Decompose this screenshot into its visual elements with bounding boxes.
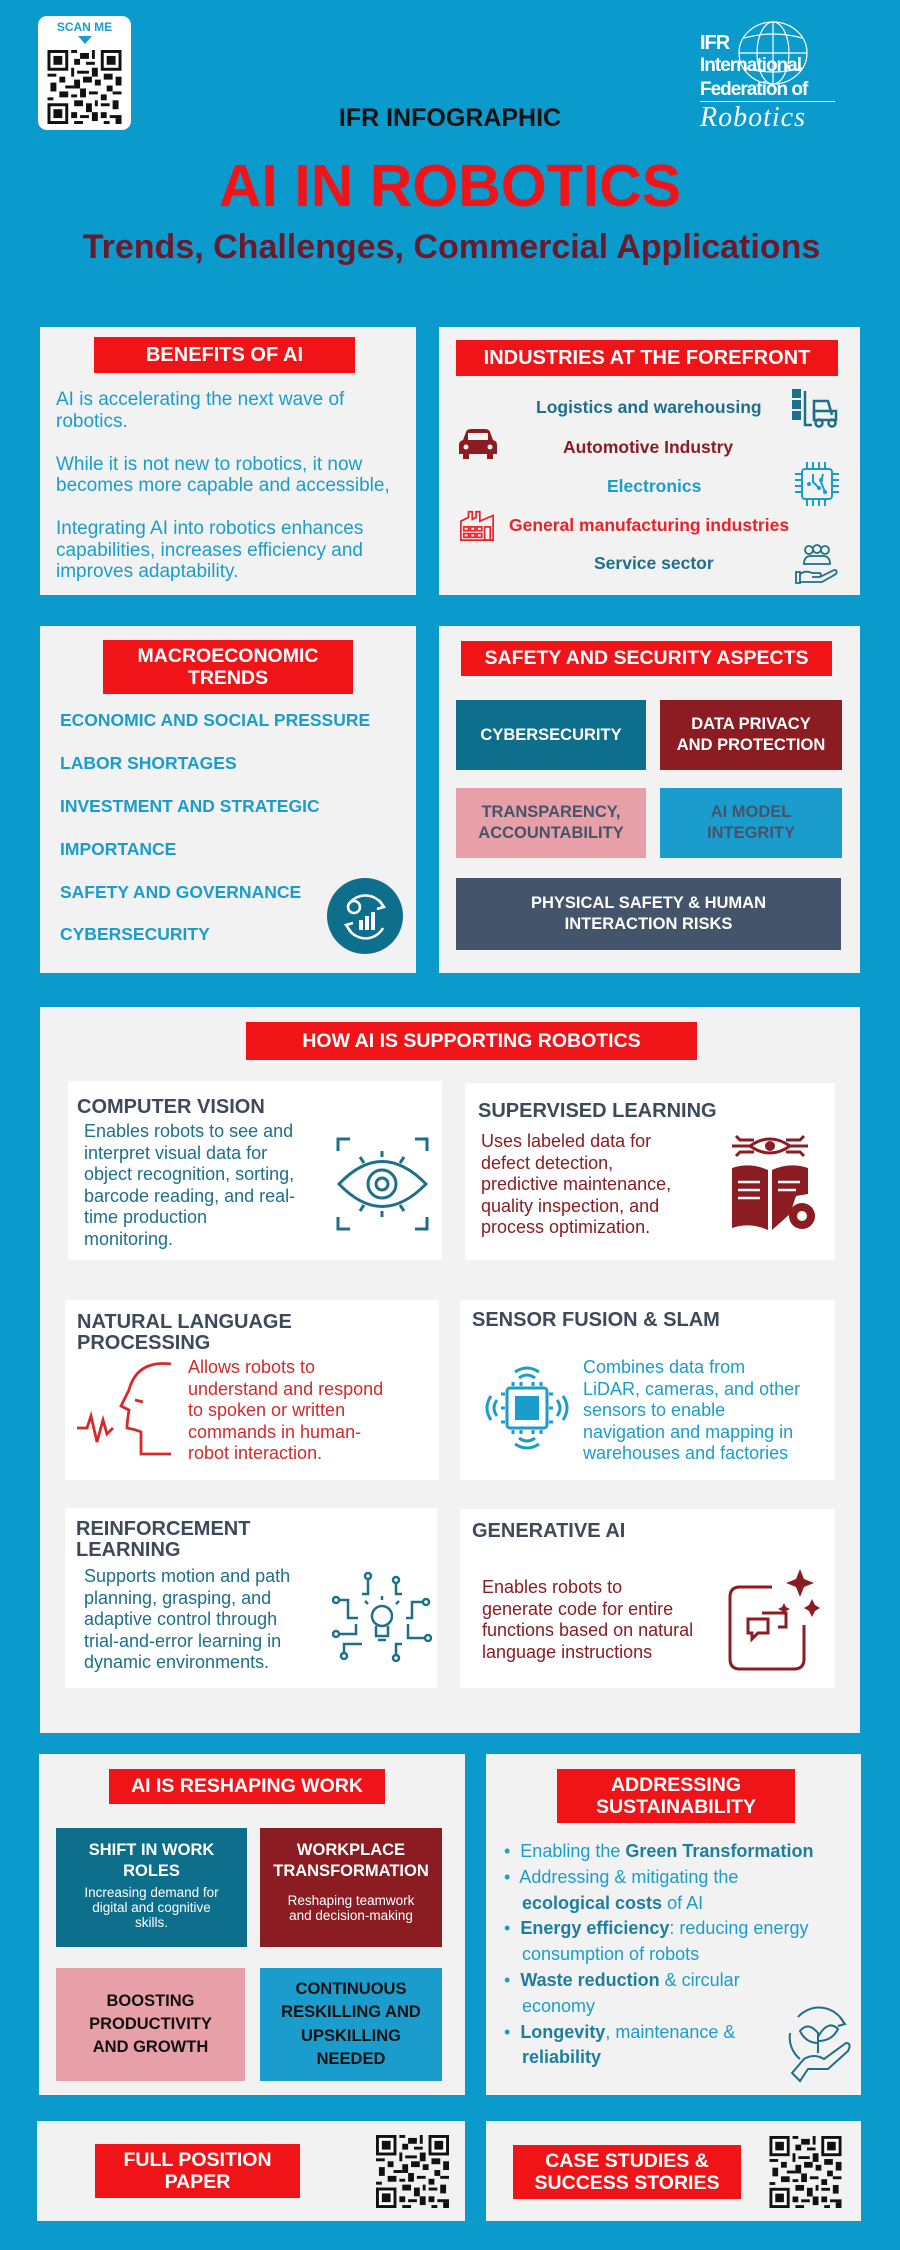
- card: reinforcement learning: planning, grasping, and: [84, 1588, 271, 1608]
- heading: safety: [461, 641, 832, 676]
- box: transparency: [456, 788, 646, 858]
- card: supervised learning: process optimization.: [481, 1217, 650, 1237]
- subtitle: Trends, Challenges, Commercial Applications: [83, 228, 820, 266]
- heading: safety: SAFETY AND SECURITY ASPECTS: [485, 647, 808, 669]
- IFR logo: IFR: [700, 32, 729, 54]
- card: computer vision: object recognition, sorting,: [84, 1164, 294, 1184]
- sustainability bullet list: consumption of robots: [522, 1944, 699, 1964]
- card: reinforcement learning: dynamic environments.: [84, 1652, 269, 1672]
- panel: sustainability: [486, 1754, 861, 2095]
- box: physical safety: INTERACTION RISKS: [565, 915, 732, 933]
- IFR logo: [700, 21, 835, 133]
- card: generative AI: generate code for entire: [482, 1598, 673, 1618]
- icon: eye: [336, 1138, 428, 1230]
- card: sensor fusion: SENSOR FUSION & SLAM: [472, 1309, 720, 1331]
- box: boosting productivity: AND GROWTH: [93, 2038, 208, 2056]
- card: sensor fusion: Combines data from: [583, 1357, 745, 1377]
- box: shift in work roles: [56, 1828, 247, 1947]
- heading: sustainability: SUSTAINABILITY: [596, 1796, 756, 1818]
- heading: benefits: BENEFITS OF AI: [146, 344, 303, 366]
- box: AI model integrity: AI MODEL: [711, 803, 791, 821]
- icon: circuit bulb: [332, 1572, 432, 1662]
- card: reinforcement learning: trial-and-error learning in: [84, 1630, 281, 1650]
- trend list: ECONOMIC AND SOCIAL PRESSURE: [60, 710, 370, 730]
- benefits text: robotics.: [56, 410, 128, 432]
- card: computer vision: barcode reading, and real-: [84, 1186, 295, 1206]
- box: workplace transformation: TRANSFORMATION: [273, 1862, 429, 1880]
- heading: macroeconomic trends: TRENDS: [188, 667, 268, 689]
- box: continuous reskilling: [260, 1968, 442, 2081]
- card: computer vision: Enables robots to see and: [84, 1121, 293, 1141]
- box: data privacy: AND PROTECTION: [677, 736, 825, 754]
- card: computer vision: COMPUTER VISION: [77, 1096, 265, 1118]
- card: natural language processing: robot interaction.: [188, 1443, 322, 1463]
- icon: forklift: [792, 389, 838, 428]
- heading: macroeconomic trends: MACROECONOMIC: [138, 645, 318, 667]
- box: shift in work roles: digital and cognitive: [92, 1900, 211, 1915]
- industry: automotive: Automotive Industry: [563, 437, 733, 457]
- box: AI model integrity: INTEGRITY: [707, 824, 795, 842]
- box: continuous reskilling: CONTINUOUS: [296, 1980, 406, 1998]
- box: workplace transformation: and decision-making: [289, 1908, 413, 1923]
- box: boosting productivity: PRODUCTIVITY: [89, 2015, 212, 2033]
- eyebrow title: IFR INFOGRAPHIC: [339, 104, 561, 132]
- card: natural language processing: NATURAL LANGUAGE: [77, 1311, 292, 1333]
- icon: speaking head: [77, 1362, 172, 1456]
- icon: sensor chip: [486, 1366, 568, 1450]
- panel: how AI is supporting robotics: [40, 1007, 860, 1733]
- card: sensor fusion: navigation and mapping in: [583, 1422, 793, 1442]
- icon: sparkle chat: [728, 1569, 820, 1670]
- button: case studies: CASE STUDIES &: [545, 2150, 709, 2172]
- box: cybersecurity: CYBERSECURITY: [480, 726, 622, 744]
- box: workplace transformation: Reshaping teamwork: [288, 1893, 414, 1908]
- IFR logo: Robotics: [700, 102, 806, 133]
- heading: how AI supports: HOW AI IS SUPPORTING ROBOTICS: [302, 1030, 641, 1052]
- card: natural language processing: PROCESSING: [77, 1332, 210, 1354]
- trend list: CYBERSECURITY: [60, 924, 210, 944]
- card: supervised learning: predictive maintenance,: [481, 1174, 671, 1194]
- IFR logo: International: [700, 55, 801, 76]
- box: continuous reskilling: UPSKILLING: [301, 2026, 401, 2044]
- box: shift in work roles: ROLES: [123, 1862, 180, 1880]
- card: computer vision: monitoring.: [84, 1228, 173, 1248]
- heading: sustainability: [557, 1769, 795, 1823]
- card: sensor fusion: LiDAR, cameras, and other: [583, 1378, 800, 1398]
- heading: sustainability: ADDRESSING: [611, 1774, 741, 1796]
- card: natural language processing: to spoken or written: [188, 1400, 345, 1420]
- card: sensor fusion: sensors to enable: [583, 1400, 725, 1420]
- heading: industries: INDUSTRIES AT THE FOREFRONT: [484, 346, 810, 368]
- card: computer vision: interpret visual data for: [84, 1142, 267, 1162]
- sustainability bullet list: • Waste reduction & circular: [504, 1970, 740, 1990]
- heading: benefits: [94, 337, 355, 373]
- heading: how AI supports: [246, 1022, 697, 1060]
- industry: logistics: Logistics and warehousing: [536, 397, 762, 417]
- sustainability bullet list: • Longevity, maintenance &: [504, 2022, 735, 2042]
- main title: AI IN ROBOTICS: [219, 153, 681, 219]
- card: supervised learning: Uses labeled data for: [481, 1131, 651, 1151]
- benefits text: becomes more capable and accessible,: [56, 475, 390, 496]
- sustainability bullet list: economy: [522, 1996, 595, 2016]
- card: computer vision: time production: [84, 1207, 207, 1227]
- scan me QR card: [38, 16, 131, 130]
- icon: service hand: [795, 544, 838, 584]
- card: generative AI: [460, 1509, 835, 1688]
- card: sensor fusion: warehouses and factories: [583, 1443, 788, 1463]
- card: supervised learning: SUPERVISED LEARNING: [478, 1100, 717, 1122]
- card: natural language processing: [65, 1300, 439, 1480]
- benefits text: improves adaptability.: [56, 561, 238, 582]
- card: reinforcement learning: LEARNING: [76, 1539, 180, 1561]
- box: AI model integrity: [660, 788, 842, 858]
- IFR logo: Federation of: [700, 79, 807, 100]
- box: physical safety: PHYSICAL SAFETY & HUMAN: [531, 894, 766, 912]
- heading: reshaping work: [109, 1769, 385, 1804]
- sustainability bullet list: ecological costs of AI: [522, 1893, 703, 1913]
- card: reinforcement learning: adaptive control through: [84, 1609, 277, 1629]
- sustainability bullet list: • Addressing & mitigating the: [504, 1867, 738, 1887]
- panel: macroeconomic trends: [40, 626, 416, 973]
- benefits text: While it is not new to robotics, it now: [56, 454, 362, 474]
- panel: industries: [439, 327, 860, 595]
- card: reinforcement learning: [65, 1508, 437, 1688]
- card: generative AI: functions based on natural: [482, 1620, 693, 1640]
- card: generative AI: Enables robots to: [482, 1577, 622, 1597]
- box: data privacy: DATA PRIVACY: [691, 715, 811, 733]
- benefits text: [56, 389, 390, 582]
- benefits text: capabilities, increases efficiency and: [56, 540, 363, 560]
- card: supervised learning: defect detection,: [481, 1152, 613, 1172]
- box: shift in work roles: Increasing demand for: [84, 1885, 219, 1900]
- industry: electronics: Electronics: [607, 476, 701, 496]
- box: physical safety: [456, 878, 841, 950]
- trend list: INVESTMENT AND STRATEGIC: [60, 796, 320, 816]
- industry: general manufacturing: General manufacturing industries: [509, 515, 789, 535]
- benefits text: AI is accelerating the next wave of: [56, 389, 344, 410]
- panel: full position paper: [37, 2121, 465, 2221]
- heading: reshaping work: AI IS RESHAPING WORK: [131, 1775, 363, 1797]
- box: shift in work roles: SHIFT IN WORK: [89, 1841, 214, 1859]
- scan me QR card: SCAN ME: [57, 20, 112, 34]
- box: continuous reskilling: RESKILLING AND: [281, 2003, 421, 2021]
- sustainability bullet list: • Enabling the Green Transformation: [504, 1841, 813, 1861]
- card: natural language processing: Allows robots to: [188, 1357, 315, 1377]
- box: boosting productivity: BOOSTING: [106, 1992, 194, 2010]
- icon: book with eye and gear: [732, 1135, 815, 1230]
- card: sensor fusion: [460, 1300, 835, 1480]
- trend list: SAFETY AND GOVERNANCE: [60, 882, 301, 902]
- box: cybersecurity: [456, 700, 646, 770]
- card: supervised learning: [465, 1083, 835, 1260]
- trend list: IMPORTANCE: [60, 839, 176, 859]
- icon: car: [459, 429, 497, 459]
- heading: industries: [456, 340, 838, 376]
- button: case studies: [513, 2145, 741, 2199]
- panel: safety and security: [439, 626, 860, 973]
- box: shift in work roles: skills.: [135, 1915, 168, 1930]
- button: full position paper: PAPER: [165, 2171, 230, 2193]
- button: full position paper: FULL POSITION: [123, 2149, 272, 2171]
- card: reinforcement learning: Supports motion and path: [84, 1566, 290, 1586]
- box: data privacy: [660, 700, 842, 770]
- panel: benefits of AI: [40, 327, 416, 595]
- QR code: [770, 2136, 842, 2208]
- box: transparency: ACCOUNTABILITY: [478, 824, 624, 842]
- heading: macroeconomic trends: [103, 640, 353, 694]
- trend list: LABOR SHORTAGES: [60, 753, 237, 773]
- icon: growth cycle circle: [327, 878, 403, 954]
- box: continuous reskilling: NEEDED: [317, 2050, 385, 2068]
- button: case studies: SUCCESS STORIES: [535, 2172, 719, 2194]
- QR code: [376, 2135, 449, 2208]
- card: generative AI: GENERATIVE AI: [472, 1520, 625, 1542]
- card: natural language processing: understand and respond: [188, 1378, 383, 1398]
- card: supervised learning: quality inspection, and: [481, 1196, 659, 1216]
- button: full position paper: [95, 2144, 300, 2198]
- card: reinforcement learning: REINFORCEMENT: [76, 1518, 250, 1540]
- icon: factory: [460, 510, 494, 541]
- sustainability bullet list: reliability: [522, 2047, 601, 2067]
- card: generative AI: language instructions: [482, 1642, 652, 1662]
- panel: case studies: [486, 2121, 861, 2221]
- box: workplace transformation: [260, 1828, 442, 1947]
- trend list: [60, 710, 370, 944]
- box: boosting productivity: [56, 1968, 245, 2081]
- sustainability bullet list: • Energy efficiency: reducing energy: [504, 1918, 808, 1938]
- card: natural language processing: commands in human-: [188, 1422, 361, 1442]
- panel: AI reshaping work: [39, 1754, 465, 2095]
- icon: chip: [795, 462, 839, 506]
- icon: plant in hand: [788, 2006, 851, 2083]
- card: computer vision: [68, 1081, 442, 1260]
- sustainability bullet list: [504, 1841, 813, 2067]
- box: transparency: TRANSPARENCY,: [481, 803, 621, 821]
- benefits text: Integrating AI into robotics enhances: [56, 518, 363, 539]
- industry: service: Service sector: [594, 553, 714, 573]
- box: workplace transformation: WORKPLACE: [297, 1841, 405, 1859]
